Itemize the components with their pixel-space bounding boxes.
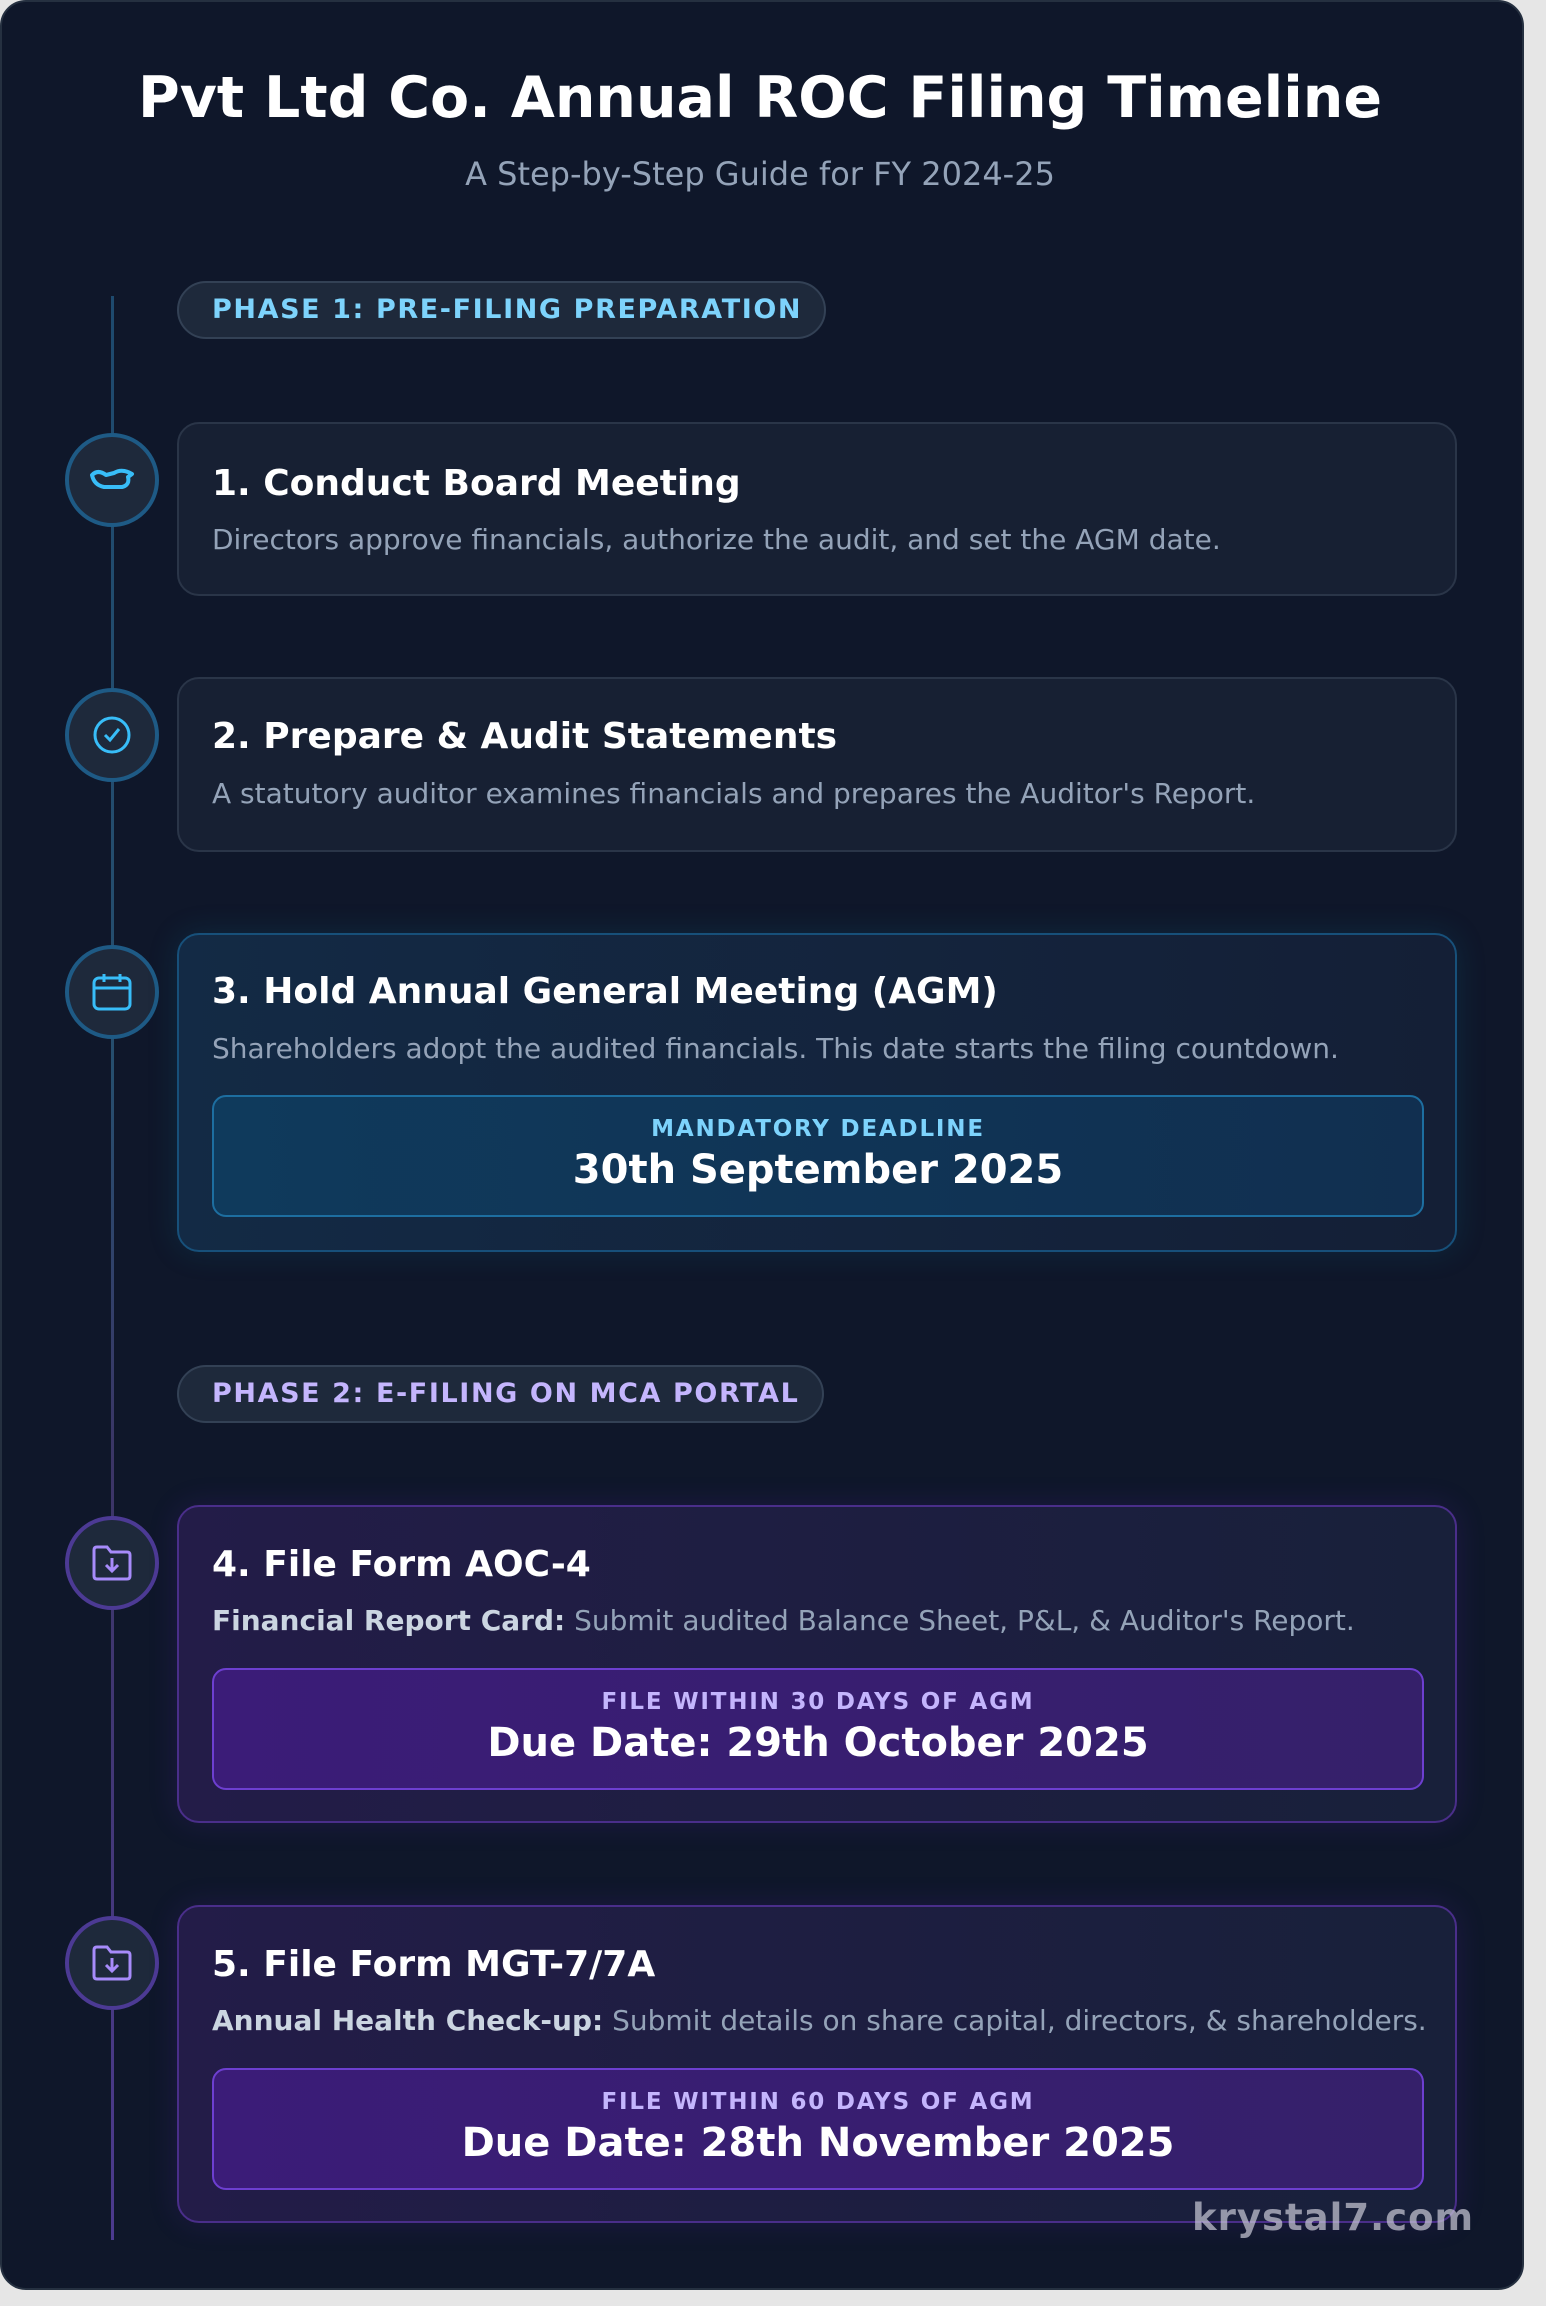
- deadline box: 30th September 2025: [573, 1147, 1063, 1193]
- card 2: [177, 677, 1457, 852]
- card 3 description: Shareholders adopt the audited financials. This date starts the filing countdown.: [212, 1032, 1339, 1065]
- card 4 title: 4. File Form AOC-4: [212, 1544, 591, 1585]
- phase 1 label: [177, 281, 826, 339]
- deadline box: [212, 1095, 1424, 1217]
- card 5 description: Annual Health Check-up: Submit details on share capital, directors, & shareholders.: [212, 2004, 1427, 2037]
- phase 2 label: PHASE 2: E-FILING ON MCA PORTAL: [212, 1378, 799, 1409]
- due date box: Due Date: 29th October 2025: [487, 1720, 1149, 1766]
- phase 1 label: PHASE 1: PRE-FILING PREPARATION: [212, 294, 802, 325]
- card 1 title: 1. Conduct Board Meeting: [212, 463, 741, 504]
- card 4 description: Financial Report Card: Submit audited Balance Sheet, P&L, & Auditor's Report.: [212, 1604, 1355, 1637]
- icon: handshake: [65, 433, 159, 527]
- icon: check circle: [65, 688, 159, 782]
- timeline line: [111, 296, 114, 2240]
- deadline box: MANDATORY DEADLINE: [651, 1116, 985, 1142]
- title: Pvt Ltd Co. Annual ROC Filing Timeline: [138, 65, 1382, 131]
- icon: folder download: [65, 1916, 159, 2010]
- icon: folder download: [65, 1516, 159, 1610]
- card 3 title: 3. Hold Annual General Meeting (AGM): [212, 971, 998, 1012]
- icon: calendar: [65, 945, 159, 1039]
- card 2 description: A statutory auditor examines financials and prepares the Auditor's Report.: [212, 777, 1255, 810]
- watermark: krystal7.com: [1192, 2196, 1474, 2239]
- card 5 title: 5. File Form MGT-7/7A: [212, 1944, 655, 1985]
- due date box: FILE WITHIN 60 DAYS OF AGM: [602, 2089, 1034, 2115]
- subtitle: A Step-by-Step Guide for FY 2024-25: [465, 155, 1055, 193]
- card 1: [177, 422, 1457, 596]
- card 3: [177, 933, 1457, 1252]
- due date box: Due Date: 28th November 2025: [462, 2120, 1174, 2166]
- phase 2 label: [177, 1365, 824, 1423]
- card 4: [177, 1505, 1457, 1823]
- due date box: [212, 2068, 1424, 2190]
- card 1 description: Directors approve financials, authorize the audit, and set the AGM date.: [212, 523, 1221, 556]
- card 5: [177, 1905, 1457, 2223]
- due date box: [212, 1668, 1424, 1790]
- due date box: FILE WITHIN 30 DAYS OF AGM: [602, 1689, 1034, 1715]
- card 2 title: 2. Prepare & Audit Statements: [212, 716, 837, 757]
